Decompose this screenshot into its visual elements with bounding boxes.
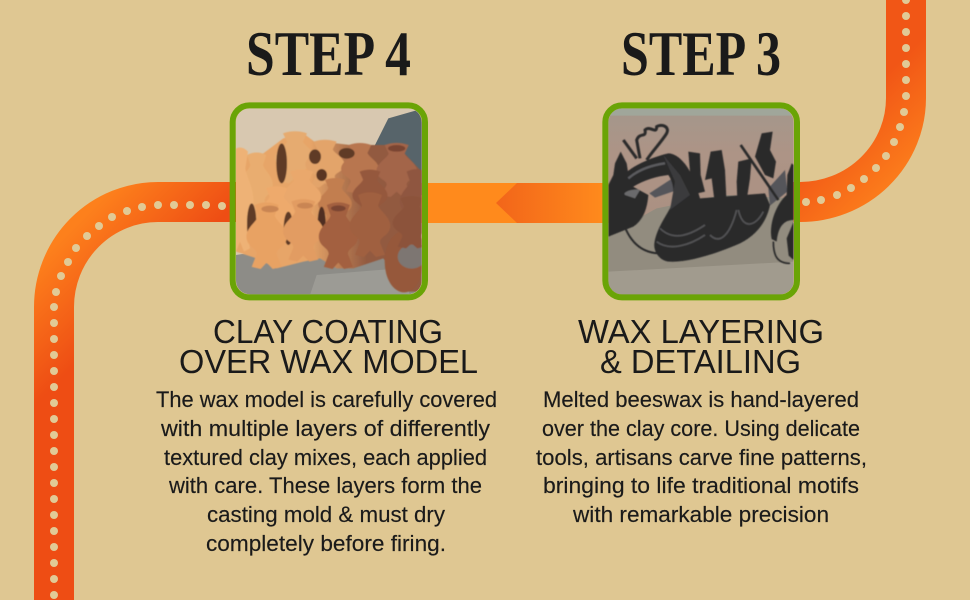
- heading: clay coating over wax model: CLAY COATING: [213, 313, 443, 350]
- text block: step 3 description: bringing to life traditional motifs: [543, 473, 859, 498]
- text block: step 3 description: tools, artisans carve fine patterns,: [536, 445, 867, 470]
- text block: step 4 description: with multiple layers of differently: [160, 416, 490, 441]
- text block: step 4 description: textured clay mixes, each applied: [164, 445, 487, 470]
- title: step 4: STEP 4: [246, 19, 411, 89]
- right dotted path: [790, 0, 910, 206]
- text block: step 3 description: [536, 387, 867, 527]
- title: step 3: STEP 3: [621, 19, 781, 89]
- photo: clay coated wax models: [227, 105, 434, 298]
- heading: clay coating over wax model: [179, 313, 478, 380]
- heading: wax layering and detailing: WAX LAYERING: [578, 313, 824, 350]
- text block: step 3 description: with remarkable precision: [572, 502, 829, 527]
- step 4 frame: [233, 105, 425, 297]
- text block: step 3 description: over the clay core. Using delicate: [542, 416, 860, 441]
- connector arrow from step 3 to step 4: [420, 183, 610, 223]
- photo: black wax boat figures: [605, 105, 797, 298]
- text block: step 4 description: casting mold & must dry: [207, 502, 445, 527]
- heading: clay coating over wax model: OVER WAX MODEL: [179, 343, 478, 380]
- heading: wax layering and detailing: [578, 313, 824, 380]
- text block: step 4 description: completely before firing.: [206, 531, 446, 556]
- step 3 frame: [605, 105, 797, 297]
- left dotted path: [50, 201, 240, 600]
- text block: step 4 description: with care. These layers form the: [168, 473, 482, 498]
- text block: step 4 description: [156, 387, 497, 556]
- text block: step 3 description: Melted beeswax is hand-layered: [543, 387, 859, 412]
- text block: step 4 description: The wax model is carefully covered: [156, 387, 497, 412]
- heading: wax layering and detailing: & DETAILING: [600, 343, 801, 380]
